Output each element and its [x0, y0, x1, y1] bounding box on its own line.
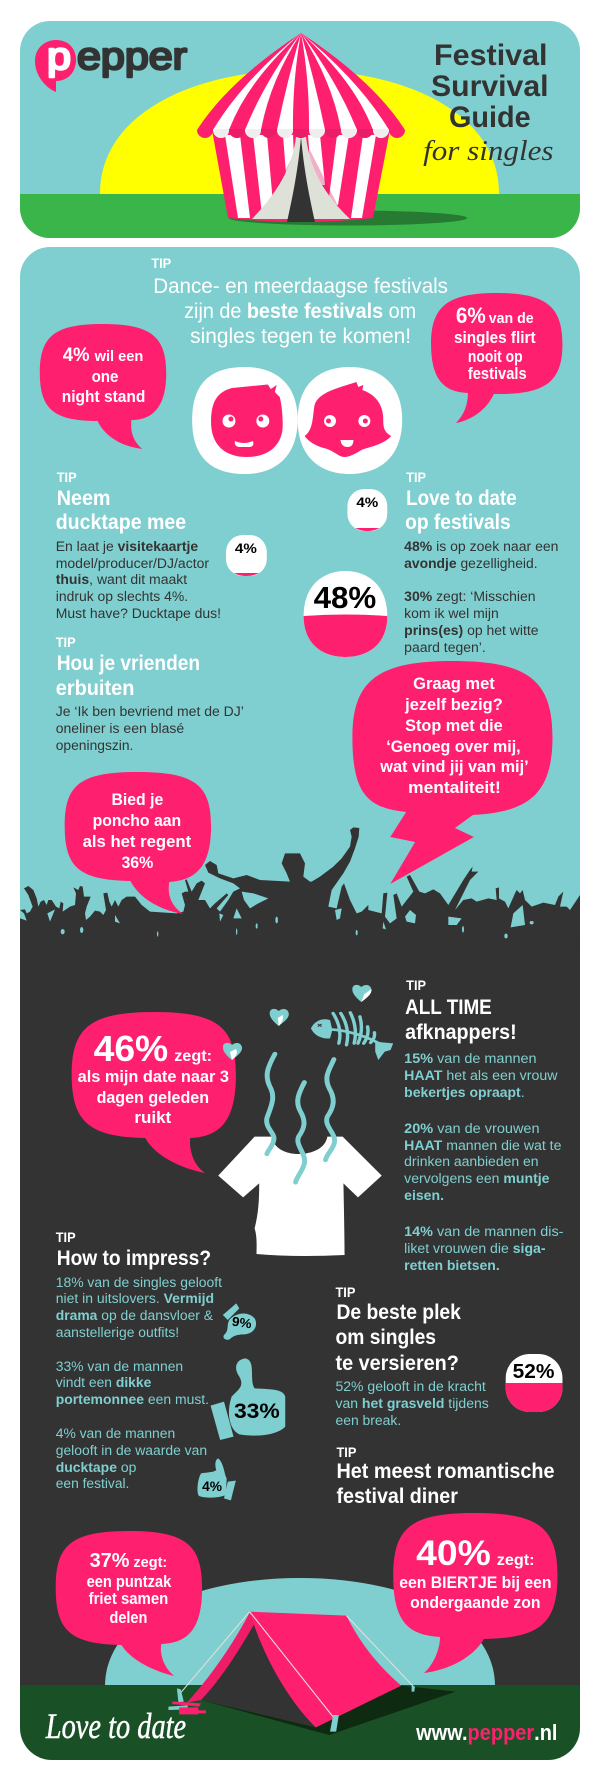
footer grass: [20, 1685, 580, 1760]
tip: love to date: TIP: [406, 470, 426, 485]
tip: romantisch diner: TIP: [336, 1445, 356, 1460]
logo: epper: [77, 36, 187, 78]
chart: 48% pill: [304, 571, 387, 657]
tip: love to date: paard tegen’.: [404, 639, 486, 655]
icon: thumb down 9%: [223, 1303, 256, 1340]
tip: how to impress: 33% van de mannen: [56, 1358, 183, 1374]
grass: [20, 194, 580, 238]
callout: 4% one night stand: 4%: [63, 345, 90, 366]
title: [423, 39, 553, 167]
tip: how to impress: How to impress?: [57, 1247, 211, 1270]
logo: [35, 36, 187, 92]
tip: de beste plek: een break.: [335, 1412, 401, 1428]
chart: 52% pill: 52%: [513, 1361, 555, 1383]
callout: 4% one night stand: night stand: [62, 387, 145, 406]
callout: bied je poncho aan: Bied je: [111, 790, 163, 809]
tip: all time afknappers: afknappers!: [405, 1021, 517, 1044]
tip: all time afknappers: retten bietsen.: [404, 1257, 500, 1273]
tip: all time afknappers: 20% van de vrouwen: [404, 1120, 540, 1136]
tip: all time afknappers: [404, 978, 564, 1273]
title: Survival: [431, 70, 549, 103]
tip: de beste plek: 52% gelooft in de kracht: [335, 1378, 486, 1394]
tip: love to date: Love to date: [406, 487, 517, 510]
tip: de beste plek: om singles: [335, 1326, 436, 1349]
callout: 6% flirt nooit: [431, 293, 562, 423]
tip: love to date: prins(es) op het witte: [404, 622, 539, 638]
tip: all time afknappers: HAAT het als een vrouw: [404, 1067, 558, 1083]
callout: 46% date ruikt: ruikt: [134, 1108, 172, 1127]
tip: hou je vrienden erbuiten: [56, 635, 244, 753]
tip: de beste plek: De beste plek: [336, 1301, 461, 1324]
tip: love to date: 30% zegt: ‘Misschien: [404, 588, 536, 604]
icon: thumb up 4%: [198, 1458, 236, 1500]
callout: graag met jezelf bezig: Graag met: [413, 674, 495, 693]
tip: all time afknappers: ALL TIME: [405, 996, 492, 1019]
icon: thumb up 33%: 33%: [234, 1400, 280, 1423]
callout: 40% biertje: ondergaande zon: [410, 1593, 541, 1612]
tip: how to impress: een festival.: [56, 1475, 129, 1491]
tip: how to impress: drama op de dansvloer &: [56, 1307, 214, 1323]
icon: thumb up 33%: [211, 1358, 285, 1440]
tip: all time afknappers: vervolgens een muntje: [404, 1170, 550, 1186]
infographic content: [40, 256, 564, 1746]
chart: 48% pill: 48%: [314, 580, 376, 615]
callout: 40% biertje: zegt:: [497, 1552, 535, 1569]
callout: 37% friet: [56, 1531, 202, 1676]
callout: 6% flirt nooit: van de: [489, 310, 534, 327]
tip: neem ducktape mee: Neem: [57, 487, 111, 510]
tip: neem ducktape mee: TIP: [57, 470, 77, 485]
logo: p: [47, 36, 71, 78]
callout: 46% date ruikt: als mijn date naar 3: [78, 1067, 229, 1086]
tip: love to date: avondje gezelligheid.: [404, 555, 538, 571]
callout: 37% friet: delen: [110, 1608, 147, 1627]
tip: love to date: [404, 470, 558, 655]
tip: de beste plek: te versieren?: [335, 1352, 459, 1375]
tip: all time afknappers: liket vrouwen die siga-: [404, 1240, 546, 1256]
tip: de beste plek: van het grasveld tijdens: [335, 1395, 489, 1411]
crowd silhouette left: [20, 853, 310, 950]
callout: 4% one night stand: wil een: [94, 348, 143, 365]
icon: fish skeleton: [311, 1013, 393, 1060]
tip: neem ducktape mee: [56, 470, 221, 621]
icon: girl face: [298, 367, 402, 474]
heading: dance festivals: zijn de beste festivals om: [184, 300, 416, 323]
callout: 46% date ruikt: dagen geleden: [97, 1088, 209, 1107]
tip: love to date: op festivals: [405, 511, 511, 534]
tip: how to impress: 18% van de singles gelooft: [56, 1274, 222, 1290]
icon: heart on bubble: [223, 1043, 242, 1060]
tip: love to date: 48% is op zoek naar een: [404, 538, 558, 554]
tip: how to impress: TIP: [56, 1230, 76, 1245]
chart: 52% pill: [506, 1354, 562, 1412]
tip: how to impress: ducktape op: [56, 1459, 137, 1475]
callout: 40% biertje: [393, 1513, 557, 1673]
callout: 40% biertje: 40%: [416, 1534, 491, 1573]
tip: neem ducktape mee: indruk op slechts 4%.: [56, 588, 188, 604]
callout: graag met jezelf bezig: ‘Genoeg over mij,: [386, 737, 521, 756]
callout: 46% date ruikt: 46%: [94, 1028, 168, 1069]
title: Festival: [434, 39, 548, 72]
footer slogan: Love to date: [45, 1706, 186, 1746]
callout: graag met jezelf bezig: wat vind jij van mij’: [379, 757, 529, 776]
tip: neem ducktape mee: En laat je visitekaartje: [56, 538, 198, 554]
icon: t-shirt with smell lines: [218, 1054, 382, 1256]
tip: all time afknappers: TIP: [406, 978, 426, 993]
callout: bied je poncho aan: poncho aan: [93, 811, 181, 830]
callout: 46% date ruikt: [72, 1012, 236, 1173]
tip: how to impress: aanstellerige outfits!: [56, 1324, 179, 1340]
icon: heart center: [270, 1009, 289, 1026]
callout: 40% biertje: een BIERTJE bij een: [399, 1573, 552, 1592]
tip: hou je vrienden erbuiten: openingszin.: [56, 737, 133, 753]
callout: 4% one night stand: [40, 324, 166, 449]
tip: de beste plek: TIP: [335, 1285, 355, 1300]
header sky: [20, 21, 580, 238]
heading: dance festivals: singles tegen te komen!: [190, 325, 411, 348]
main panel background: [20, 247, 580, 1760]
tip: how to impress: 4% van de mannen: [56, 1425, 175, 1441]
illustration: camping tent: [168, 1612, 456, 1735]
icon: thumb up 4%: 4%: [202, 1478, 223, 1494]
tip: all time afknappers: drinken aanbieden en: [404, 1153, 539, 1169]
tip: hou je vrienden erbuiten: erbuiten: [56, 677, 134, 700]
tip: all time afknappers: eisen.: [404, 1187, 444, 1203]
callout: graag met jezelf bezig: mentaliteit!: [408, 778, 501, 797]
callout: 6% flirt nooit: singles flirt: [454, 328, 536, 347]
tip: how to impress: [56, 1230, 222, 1491]
tip: neem ducktape mee: Must have? Ducktape dus!: [56, 605, 221, 621]
icon: heart near fish: [352, 985, 371, 1002]
callout: 37% friet: zegt:: [133, 1554, 167, 1571]
callout: bied je poncho aan: 36%: [121, 853, 153, 872]
chart: 4% pill left: [226, 535, 267, 576]
heading: dance festivals: [151, 256, 448, 348]
header panel: [20, 21, 580, 238]
tip: all time afknappers: HAAT mannen die wat te: [404, 1137, 562, 1153]
tip: romantisch diner: Het meest romantische: [336, 1460, 554, 1483]
callout: 4% one night stand: one: [92, 367, 118, 386]
callout: bied je poncho aan: als het regent: [83, 832, 191, 851]
callout: 6% flirt nooit: 6%: [456, 303, 486, 328]
icon: thumb down 9%: 9%: [231, 1314, 253, 1331]
callout: bied je poncho aan: [65, 772, 211, 914]
sun: [100, 70, 499, 194]
tip: romantisch diner: festival diner: [336, 1485, 458, 1508]
tip: neem ducktape mee: model/producer/DJ/actor: [56, 555, 209, 571]
callout: graag met jezelf bezig: [352, 661, 553, 884]
tip: hou je vrienden erbuiten: Hou je vrienden: [57, 652, 200, 675]
light dome: [105, 1578, 495, 1686]
callout: 6% flirt nooit: festivals: [468, 364, 527, 383]
title: for singles: [423, 135, 553, 167]
chart: 4% pill right: [347, 489, 387, 531]
chart: 4% pill left: 4%: [235, 540, 257, 556]
footer url: www.pepper.nl: [415, 1720, 557, 1745]
tip: how to impress: vindt een dikke: [56, 1374, 152, 1390]
callout: 37% friet: 37%: [90, 1550, 130, 1572]
callout: 37% friet: friet samen: [89, 1589, 168, 1608]
tip: romantisch diner: [336, 1445, 554, 1508]
tip: how to impress: portemonnee een must.: [56, 1391, 209, 1407]
tip: how to impress: niet in uitslovers. Vermijd: [56, 1290, 214, 1306]
tip: all time afknappers: bekertjes opraapt.: [404, 1084, 525, 1100]
callout: graag met jezelf bezig: Stop met die: [405, 716, 503, 735]
callout: graag met jezelf bezig: jezelf bezig?: [404, 695, 503, 714]
tip: love to date: kom ik wel mijn: [404, 605, 499, 621]
tip: de beste plek: [335, 1285, 489, 1428]
callout: 37% friet: een puntzak: [87, 1572, 172, 1591]
heading: dance festivals: TIP: [151, 256, 171, 271]
tip: neem ducktape mee: ducktape mee: [56, 511, 186, 534]
tip: all time afknappers: 15% van de mannen: [404, 1050, 537, 1066]
tip: how to impress: gelooft in de waarde van: [56, 1442, 207, 1458]
tip: all time afknappers: 14% van de mannen dis-: [404, 1223, 564, 1239]
tip: hou je vrienden erbuiten: oneliner is een blasé: [56, 720, 184, 736]
crowd silhouette right: [300, 827, 580, 950]
icon: boy face: [192, 367, 298, 474]
tip: neem ducktape mee: thuis, want dit maakt: [56, 571, 187, 587]
callout: 46% date ruikt: zegt:: [174, 1048, 212, 1065]
heading: dance festivals: Dance- en meerdaagse festivals: [153, 275, 448, 298]
tip: hou je vrienden erbuiten: Je ‘Ik ben bevriend met de DJ’: [56, 703, 244, 719]
callout: 6% flirt nooit: nooit op: [468, 347, 523, 366]
tip: hou je vrienden erbuiten: TIP: [56, 635, 76, 650]
tent shadow: [229, 210, 467, 226]
chart: 4% pill right: 4%: [356, 494, 379, 510]
title: Guide: [449, 101, 531, 134]
circus tent: [197, 33, 405, 222]
